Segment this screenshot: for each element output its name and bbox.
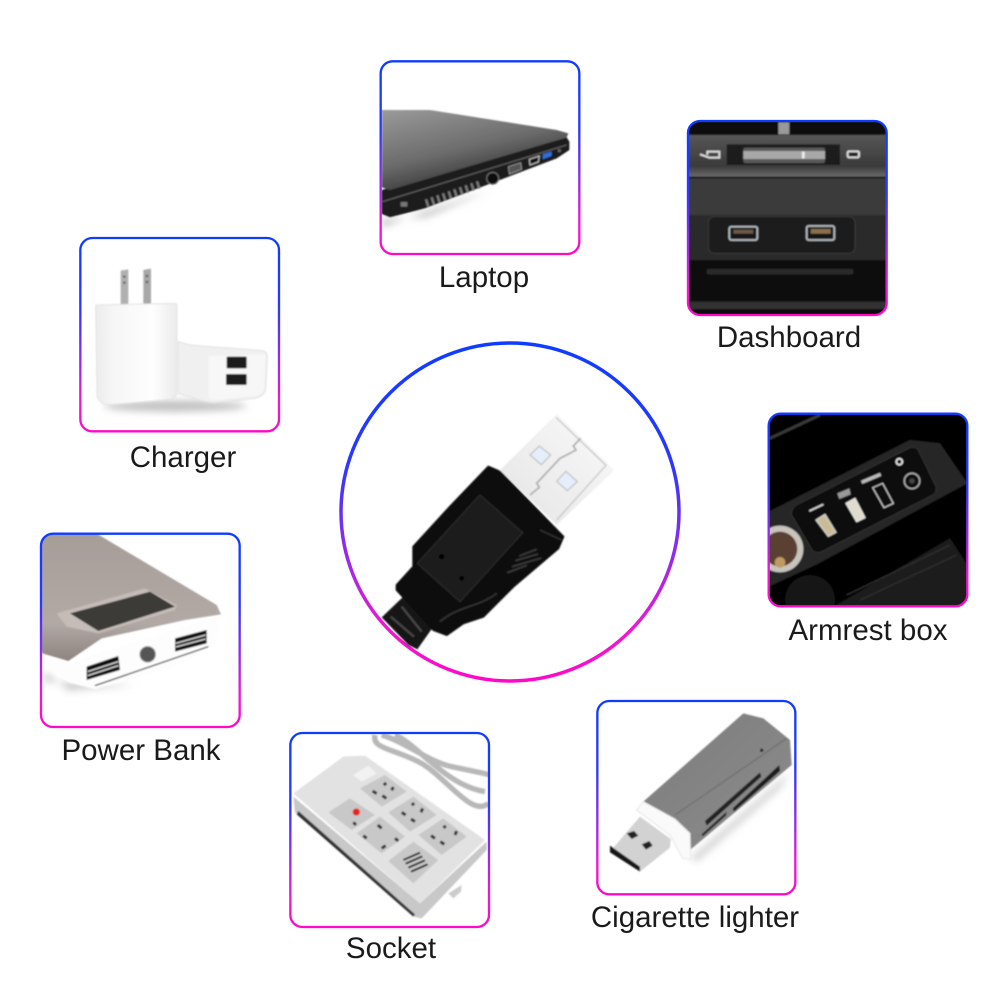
laptop photo	[382, 110, 569, 227]
circle ring	[341, 343, 679, 681]
socket photo	[293, 735, 490, 918]
dashboard frame	[688, 121, 887, 315]
label: cigarette lighter: Cigarette lighter	[591, 901, 799, 934]
panel: armrest box	[768, 412, 968, 608]
panel: laptop	[381, 61, 579, 254]
power bank frame	[41, 534, 240, 727]
label: dashboard: Dashboard	[717, 321, 861, 354]
card reader photo	[610, 713, 792, 872]
USB plug	[382, 414, 614, 649]
label: armrest box: Armrest box	[788, 614, 948, 647]
card reader frame	[597, 701, 795, 894]
panel: charger	[80, 238, 279, 431]
armrest frame	[769, 414, 967, 606]
charger photo	[96, 269, 267, 411]
panel: socket	[290, 733, 490, 927]
panel: power bank	[41, 534, 240, 727]
laptop frame	[381, 61, 579, 254]
power bank photo	[41, 534, 222, 690]
panel: cigarette lighter	[597, 701, 795, 894]
central circle: USB plug	[341, 343, 679, 681]
dashboard photo	[688, 121, 887, 315]
label: power bank: Power Bank	[61, 734, 221, 767]
armrest photo	[770, 414, 966, 606]
label: socket: Socket	[346, 932, 436, 965]
label: charger: Charger	[130, 441, 236, 474]
label: laptop: Laptop	[439, 261, 529, 294]
charger frame	[80, 238, 279, 431]
socket frame	[290, 733, 489, 927]
panel: dashboard	[688, 121, 887, 315]
